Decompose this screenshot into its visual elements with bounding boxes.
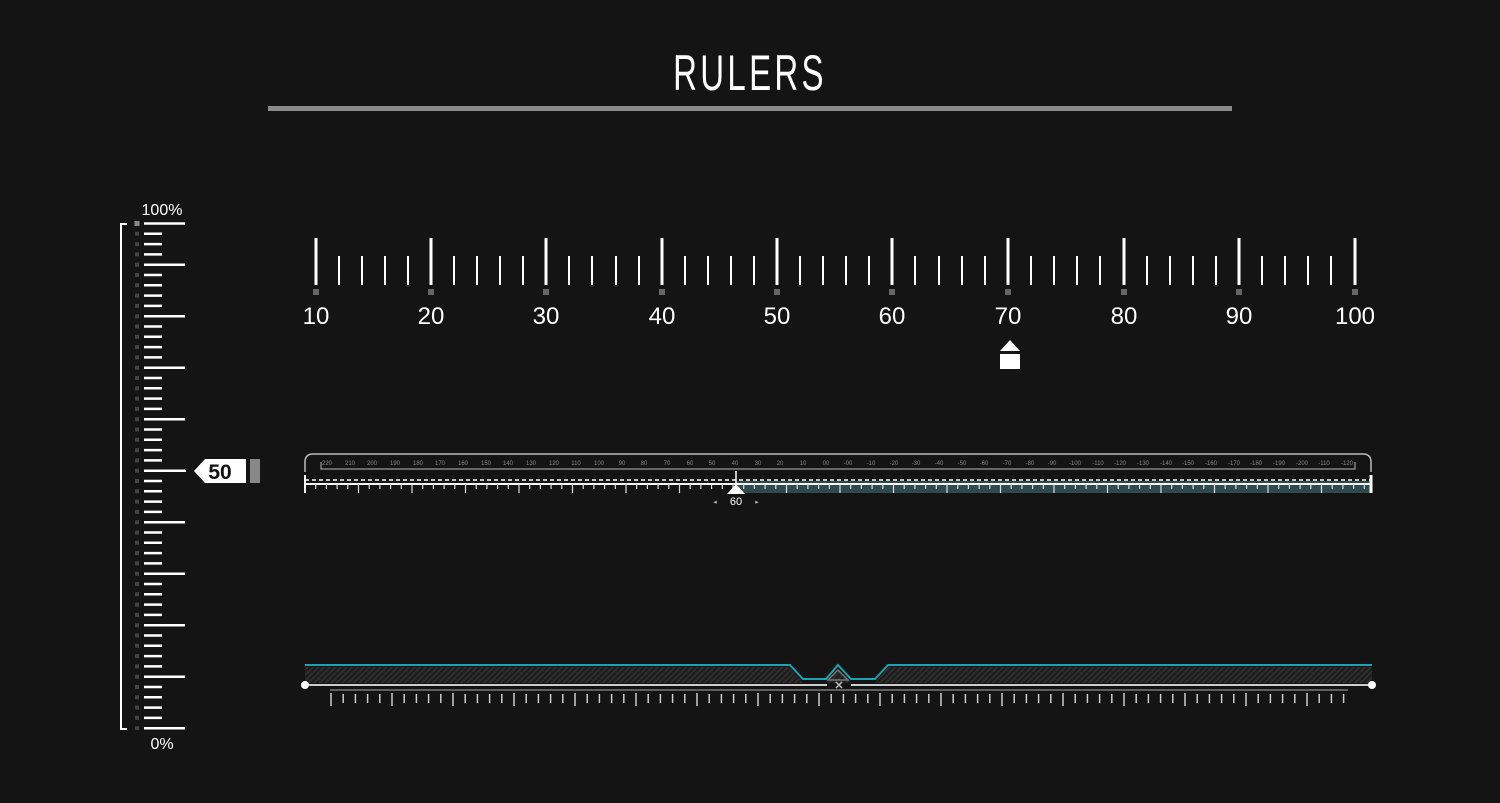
middle ruler: -200 [1296,461,1309,467]
middle ruler: 20 [777,461,784,467]
middle ruler: 100 [594,461,605,467]
middle ruler: 220 [322,461,333,467]
middle ruler: 60 [687,461,694,467]
slider marker: 60 [713,471,759,508]
middle ruler: -120 [1114,461,1127,467]
middle ruler: 40 [732,461,739,467]
middle ruler [305,454,1372,508]
middle ruler: -40 [935,461,944,467]
horizontal ruler top [303,238,1375,330]
horizontal ruler top: 90 [1226,303,1252,330]
horizontal ruler top: 40 [649,303,675,330]
bottom ruler: ✕ [834,680,844,692]
middle ruler: 190 [390,461,401,467]
bottom ruler [301,665,1376,706]
horizontal ruler top: 80 [1111,303,1137,330]
middle ruler: -150 [1182,461,1195,467]
marker: 70 [1000,340,1020,369]
middle ruler: 180 [413,461,424,467]
vertical ruler [121,202,185,753]
middle ruler: -70 [1003,461,1012,467]
middle ruler: 70 [664,461,671,467]
horizontal ruler top: 70 [995,303,1021,330]
middle ruler: -190 [1273,461,1286,467]
middle ruler: -30 [912,461,921,467]
vertical ruler: 0% [150,736,174,753]
marker: 50: 50 [208,461,232,484]
middle ruler: -60 [980,461,989,467]
middle ruler: -110 [1092,461,1104,467]
middle ruler: 30 [755,461,762,467]
middle ruler: -90 [1048,461,1057,467]
title [268,45,1232,111]
middle ruler: -80 [1026,461,1035,467]
middle ruler: -10 [867,461,876,467]
middle ruler: 50 [709,461,716,467]
middle ruler: -140 [1160,461,1173,467]
title: RULERS [673,45,827,101]
middle ruler: 150 [481,461,492,467]
horizontal ruler top: 10 [303,303,329,330]
middle ruler: 160 [458,461,469,467]
middle ruler: -120 [1341,461,1354,467]
horizontal ruler top: 30 [533,303,559,330]
middle ruler: -00 [844,461,853,467]
middle ruler: 130 [526,461,537,467]
slider marker: 60: 60 [730,496,742,508]
middle ruler: -100 [1069,461,1082,467]
middle ruler: 140 [503,461,514,467]
vertical ruler: 100% [142,202,182,219]
middle ruler: -180 [1250,461,1263,467]
middle ruler: 10 [800,461,807,467]
middle ruler: -130 [1137,461,1150,467]
middle ruler: 120 [549,461,560,467]
middle ruler: 00 [823,461,830,467]
middle ruler: 110 [571,461,581,467]
middle ruler: 210 [345,461,356,467]
middle ruler: -20 [890,461,899,467]
middle ruler: 80 [641,461,648,467]
middle ruler: -110 [1318,461,1330,467]
middle ruler: 170 [435,461,446,467]
marker: 50 [180,459,260,484]
horizontal ruler top: 20 [418,303,444,330]
slider marker: 60: ▸ [755,499,759,506]
middle ruler: 90 [619,461,626,467]
middle ruler: -170 [1228,461,1241,467]
middle ruler: 200 [367,461,378,467]
horizontal ruler top: 100 [1335,303,1375,330]
slider marker: 60: ◂ [713,499,717,506]
horizontal ruler top: 60 [879,303,905,330]
horizontal ruler top: 50 [764,303,790,330]
middle ruler: -160 [1205,461,1218,467]
middle ruler: -50 [958,461,967,467]
